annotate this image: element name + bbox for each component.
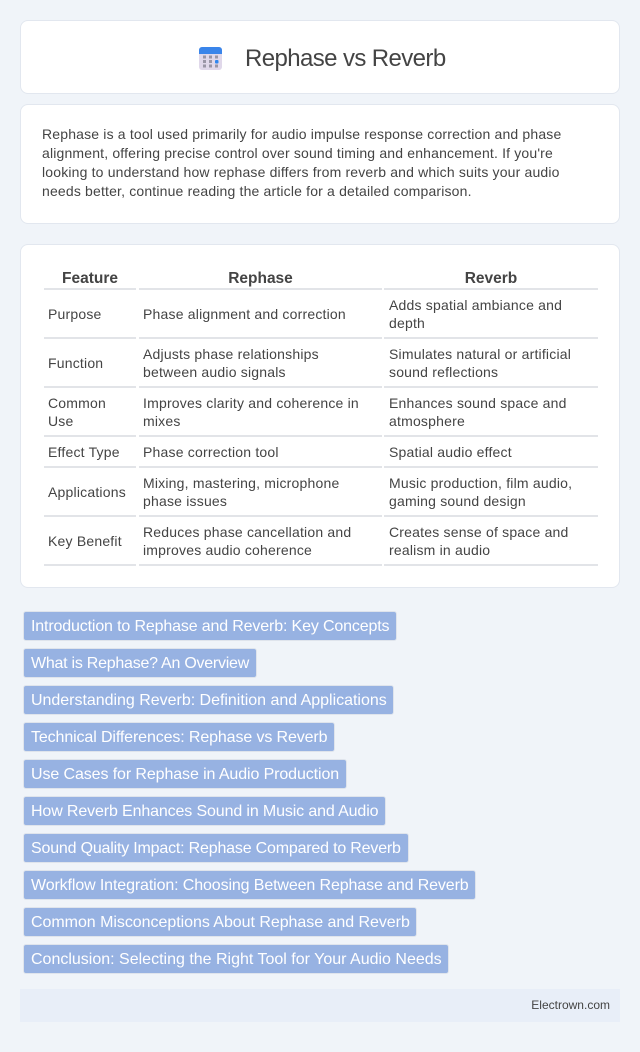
row: Key Benefit xyxy=(48,524,569,558)
topic button 4: Technical Differences: Rephase vs Reverb xyxy=(31,729,327,746)
row: Purpose: Purpose xyxy=(48,306,102,322)
row: Applications: Mixing, mastering, microphone xyxy=(143,475,339,491)
topic button 2 xyxy=(23,648,257,678)
topic list xyxy=(23,611,476,974)
topic button 6: How Reverb Enhances Sound in Music and Audio xyxy=(31,803,378,820)
topic button 2: What is Rephase? An Overview xyxy=(31,655,249,672)
topic button 6 xyxy=(23,796,386,826)
row: Function: sound reflections xyxy=(389,364,498,380)
topic button 7 xyxy=(23,833,409,863)
topic button 1 xyxy=(23,611,397,641)
row: Purpose: Adds spatial ambiance and xyxy=(389,297,562,313)
topic button 8 xyxy=(23,870,476,900)
row: Applications: Music production, film audio, xyxy=(389,475,572,491)
row: Applications: phase issues xyxy=(143,493,227,509)
row: Purpose: Phase alignment and correction xyxy=(143,306,346,322)
row: Function: between audio signals xyxy=(143,364,286,380)
header card xyxy=(20,20,620,94)
intro paragraph: looking to understand how rephase differs from reverb and which suits your audio xyxy=(42,164,560,180)
row: Key Benefit: Creates sense of space and xyxy=(389,524,569,540)
row: Key Benefit: Key Benefit xyxy=(48,533,122,549)
row: Function: Function xyxy=(48,355,103,371)
row: Applications: Applications xyxy=(48,484,126,500)
topic button 9: Common Misconceptions About Rephase and Reverb xyxy=(31,914,410,931)
row: Effect Type: Effect Type xyxy=(48,444,120,460)
topic button 3: Understanding Reverb: Definition and Applications xyxy=(31,692,387,709)
row: Common Use xyxy=(48,395,567,429)
row: Function xyxy=(48,346,571,380)
row: Function: Simulates natural or artificial xyxy=(389,346,571,362)
intro paragraph: alignment, offering precise control over sound timing and enhancement. If you're xyxy=(42,145,553,161)
intro paragraph: Rephase is a tool used primarily for audio impulse response correction and phase xyxy=(42,126,561,142)
row: Key Benefit: realism in audio xyxy=(389,542,490,558)
footer xyxy=(20,989,620,1022)
table header: Reverb xyxy=(465,270,517,287)
row: Effect Type xyxy=(48,444,512,460)
topic button 4 xyxy=(23,722,335,752)
intro paragraph xyxy=(42,126,561,199)
topic button 8: Workflow Integration: Choosing Between Rephase and Reverb xyxy=(31,877,469,894)
intro paragraph: needs better, continue reading the article for a detailed comparison. xyxy=(42,183,472,199)
row: Purpose xyxy=(48,297,562,331)
row: Applications xyxy=(48,475,572,509)
topic button 1: Introduction to Rephase and Reverb: Key Concepts xyxy=(31,618,389,635)
title: Rephase vs Reverb xyxy=(245,45,446,72)
row: Common Use: Common xyxy=(48,395,106,411)
footer credit: Electrown.com xyxy=(531,998,610,1012)
row: Key Benefit: improves audio coherence xyxy=(143,542,312,558)
row: Key Benefit: Reduces phase cancellation and xyxy=(143,524,351,540)
row: Common Use: mixes xyxy=(143,413,181,429)
row: Common Use: Improves clarity and coherence in xyxy=(143,395,359,411)
row: Common Use: Use xyxy=(48,413,74,429)
table header: Rephase xyxy=(228,270,293,287)
topic button 10: Conclusion: Selecting the Right Tool for Your Audio Needs xyxy=(31,951,442,968)
row: Function: Adjusts phase relationships xyxy=(143,346,319,362)
row: Effect Type: Phase correction tool xyxy=(143,444,279,460)
topic button 9 xyxy=(23,907,417,937)
table header: Feature xyxy=(62,270,118,287)
topic button 7: Sound Quality Impact: Rephase Compared to Reverb xyxy=(31,840,401,857)
row: Common Use: Enhances sound space and xyxy=(389,395,567,411)
icon: calendar xyxy=(199,47,222,70)
topic button 5: Use Cases for Rephase in Audio Production xyxy=(31,766,339,783)
topic button 5 xyxy=(23,759,347,789)
row: Applications: gaming sound design xyxy=(389,493,526,509)
comparison table card xyxy=(20,244,620,588)
row: Effect Type: Spatial audio effect xyxy=(389,444,512,460)
table header xyxy=(62,270,517,287)
topic button 3 xyxy=(23,685,394,715)
intro text card xyxy=(20,104,620,224)
row: Common Use: atmosphere xyxy=(389,413,465,429)
topic button 10 xyxy=(23,944,449,974)
row: Purpose: depth xyxy=(389,315,425,331)
